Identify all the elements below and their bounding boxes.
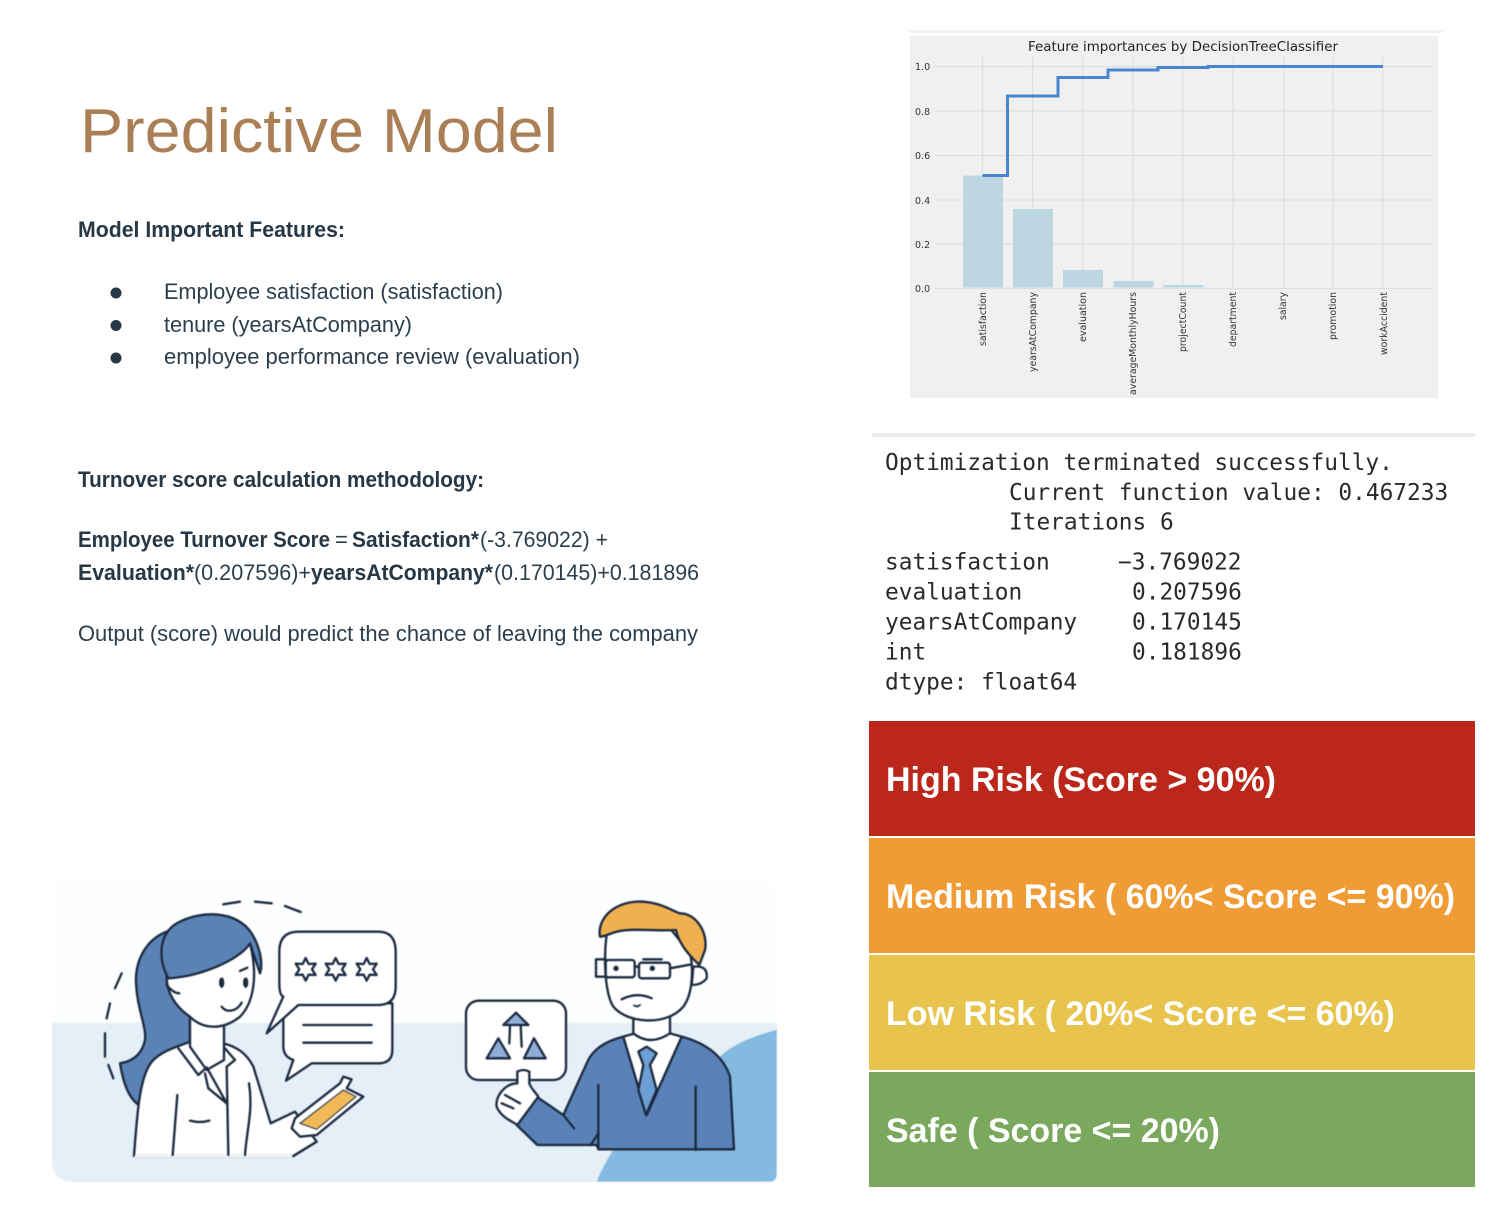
heading: turnover score methodology: Turnover score calculation methodology: [78, 467, 484, 492]
risk band: high [869, 721, 1475, 836]
regression output console: int [885, 640, 926, 666]
y axis labels: 0.8 [915, 107, 930, 118]
regression output console: 0.181896 [1132, 640, 1242, 666]
x axis labels: department [1228, 292, 1239, 347]
risk band: medium: Medium Risk ( 60%< Score <= 90%) [886, 878, 1455, 916]
text: output explanation: Output (score) would predict the chance of leaving the company [78, 621, 698, 646]
x axis labels: evaluation [1078, 292, 1089, 342]
formula: employee turnover score: Satisfaction* [352, 527, 479, 552]
regression output console: Optimization terminated successfully. [885, 450, 1393, 476]
y axis labels: 0.4 [915, 196, 930, 207]
bullet list: features: Employee satisfaction (satisfaction) [164, 279, 503, 304]
risk band: safe [869, 1072, 1475, 1187]
formula: employee turnover score: Evaluation* [78, 560, 194, 585]
y axis labels: 1.0 [915, 62, 930, 73]
x axis labels: averageMonthlyHours [1128, 292, 1139, 395]
regression output console: Iterations 6 [1009, 510, 1174, 536]
illustration: woman with review bubbles [105, 902, 396, 1156]
bullet list: features [110, 279, 580, 369]
formula: employee turnover score: (0.207596)+ [194, 560, 311, 585]
regression output console: satisfaction [885, 550, 1050, 576]
chart title: Feature importances by DecisionTreeClassifier [1028, 39, 1338, 55]
cumulative importance line [982, 66, 1383, 176]
regression output console: dtype: float64 [885, 670, 1077, 696]
x axis labels: salary [1278, 292, 1289, 320]
illustration: employee and manager [52, 877, 777, 1182]
x axis labels: projectCount [1178, 292, 1189, 352]
risk band: low [869, 955, 1475, 1070]
risk band: low: Low Risk ( 20%< Score <= 60%) [886, 995, 1395, 1033]
formula: employee turnover score: (-3.769022) + [480, 527, 608, 552]
y axis labels [915, 62, 930, 295]
regression output console: −3.769022 [1118, 550, 1242, 576]
x axis labels: yearsAtCompany [1028, 292, 1039, 372]
x axis labels: satisfaction [978, 292, 989, 346]
regression output console: Current function value: 0.467233 [1009, 480, 1448, 506]
x axis labels: promotion [1328, 292, 1339, 340]
risk band: safe: Safe ( Score <= 20%) [886, 1112, 1220, 1150]
formula: employee turnover score: Employee Turnover Score [78, 527, 330, 552]
y axis labels: 0.2 [915, 240, 930, 251]
heading: model important features: Model Important Features: [78, 217, 345, 242]
formula: employee turnover score [78, 527, 699, 585]
regression output console [872, 433, 1475, 696]
x axis labels: workAccident [1379, 292, 1390, 355]
regression output console: 0.170145 [1132, 610, 1242, 636]
x axis labels [978, 292, 1390, 395]
regression output console: yearsAtCompany [885, 610, 1077, 636]
illustration: manager with decision card [466, 902, 777, 1182]
formula: employee turnover score: (0.170145)+0.181896 [494, 560, 699, 585]
title: Predictive Model [80, 97, 558, 166]
y axis labels: 0.0 [915, 284, 930, 295]
regression output console: 0.207596 [1132, 580, 1242, 606]
bullet list: features: employee performance review (evaluation) [164, 344, 580, 369]
formula: employee turnover score: = [335, 527, 348, 552]
risk band: medium [869, 838, 1475, 953]
chart: feature importances [910, 30, 1442, 398]
regression output console: evaluation [885, 580, 1022, 606]
formula: employee turnover score: yearsAtCompany* [311, 560, 493, 585]
risk band: high: High Risk (Score > 90%) [886, 761, 1276, 799]
chart bars [963, 176, 1204, 288]
bullet list: features: tenure (yearsAtCompany) [164, 312, 412, 337]
y axis labels: 0.6 [915, 151, 930, 162]
